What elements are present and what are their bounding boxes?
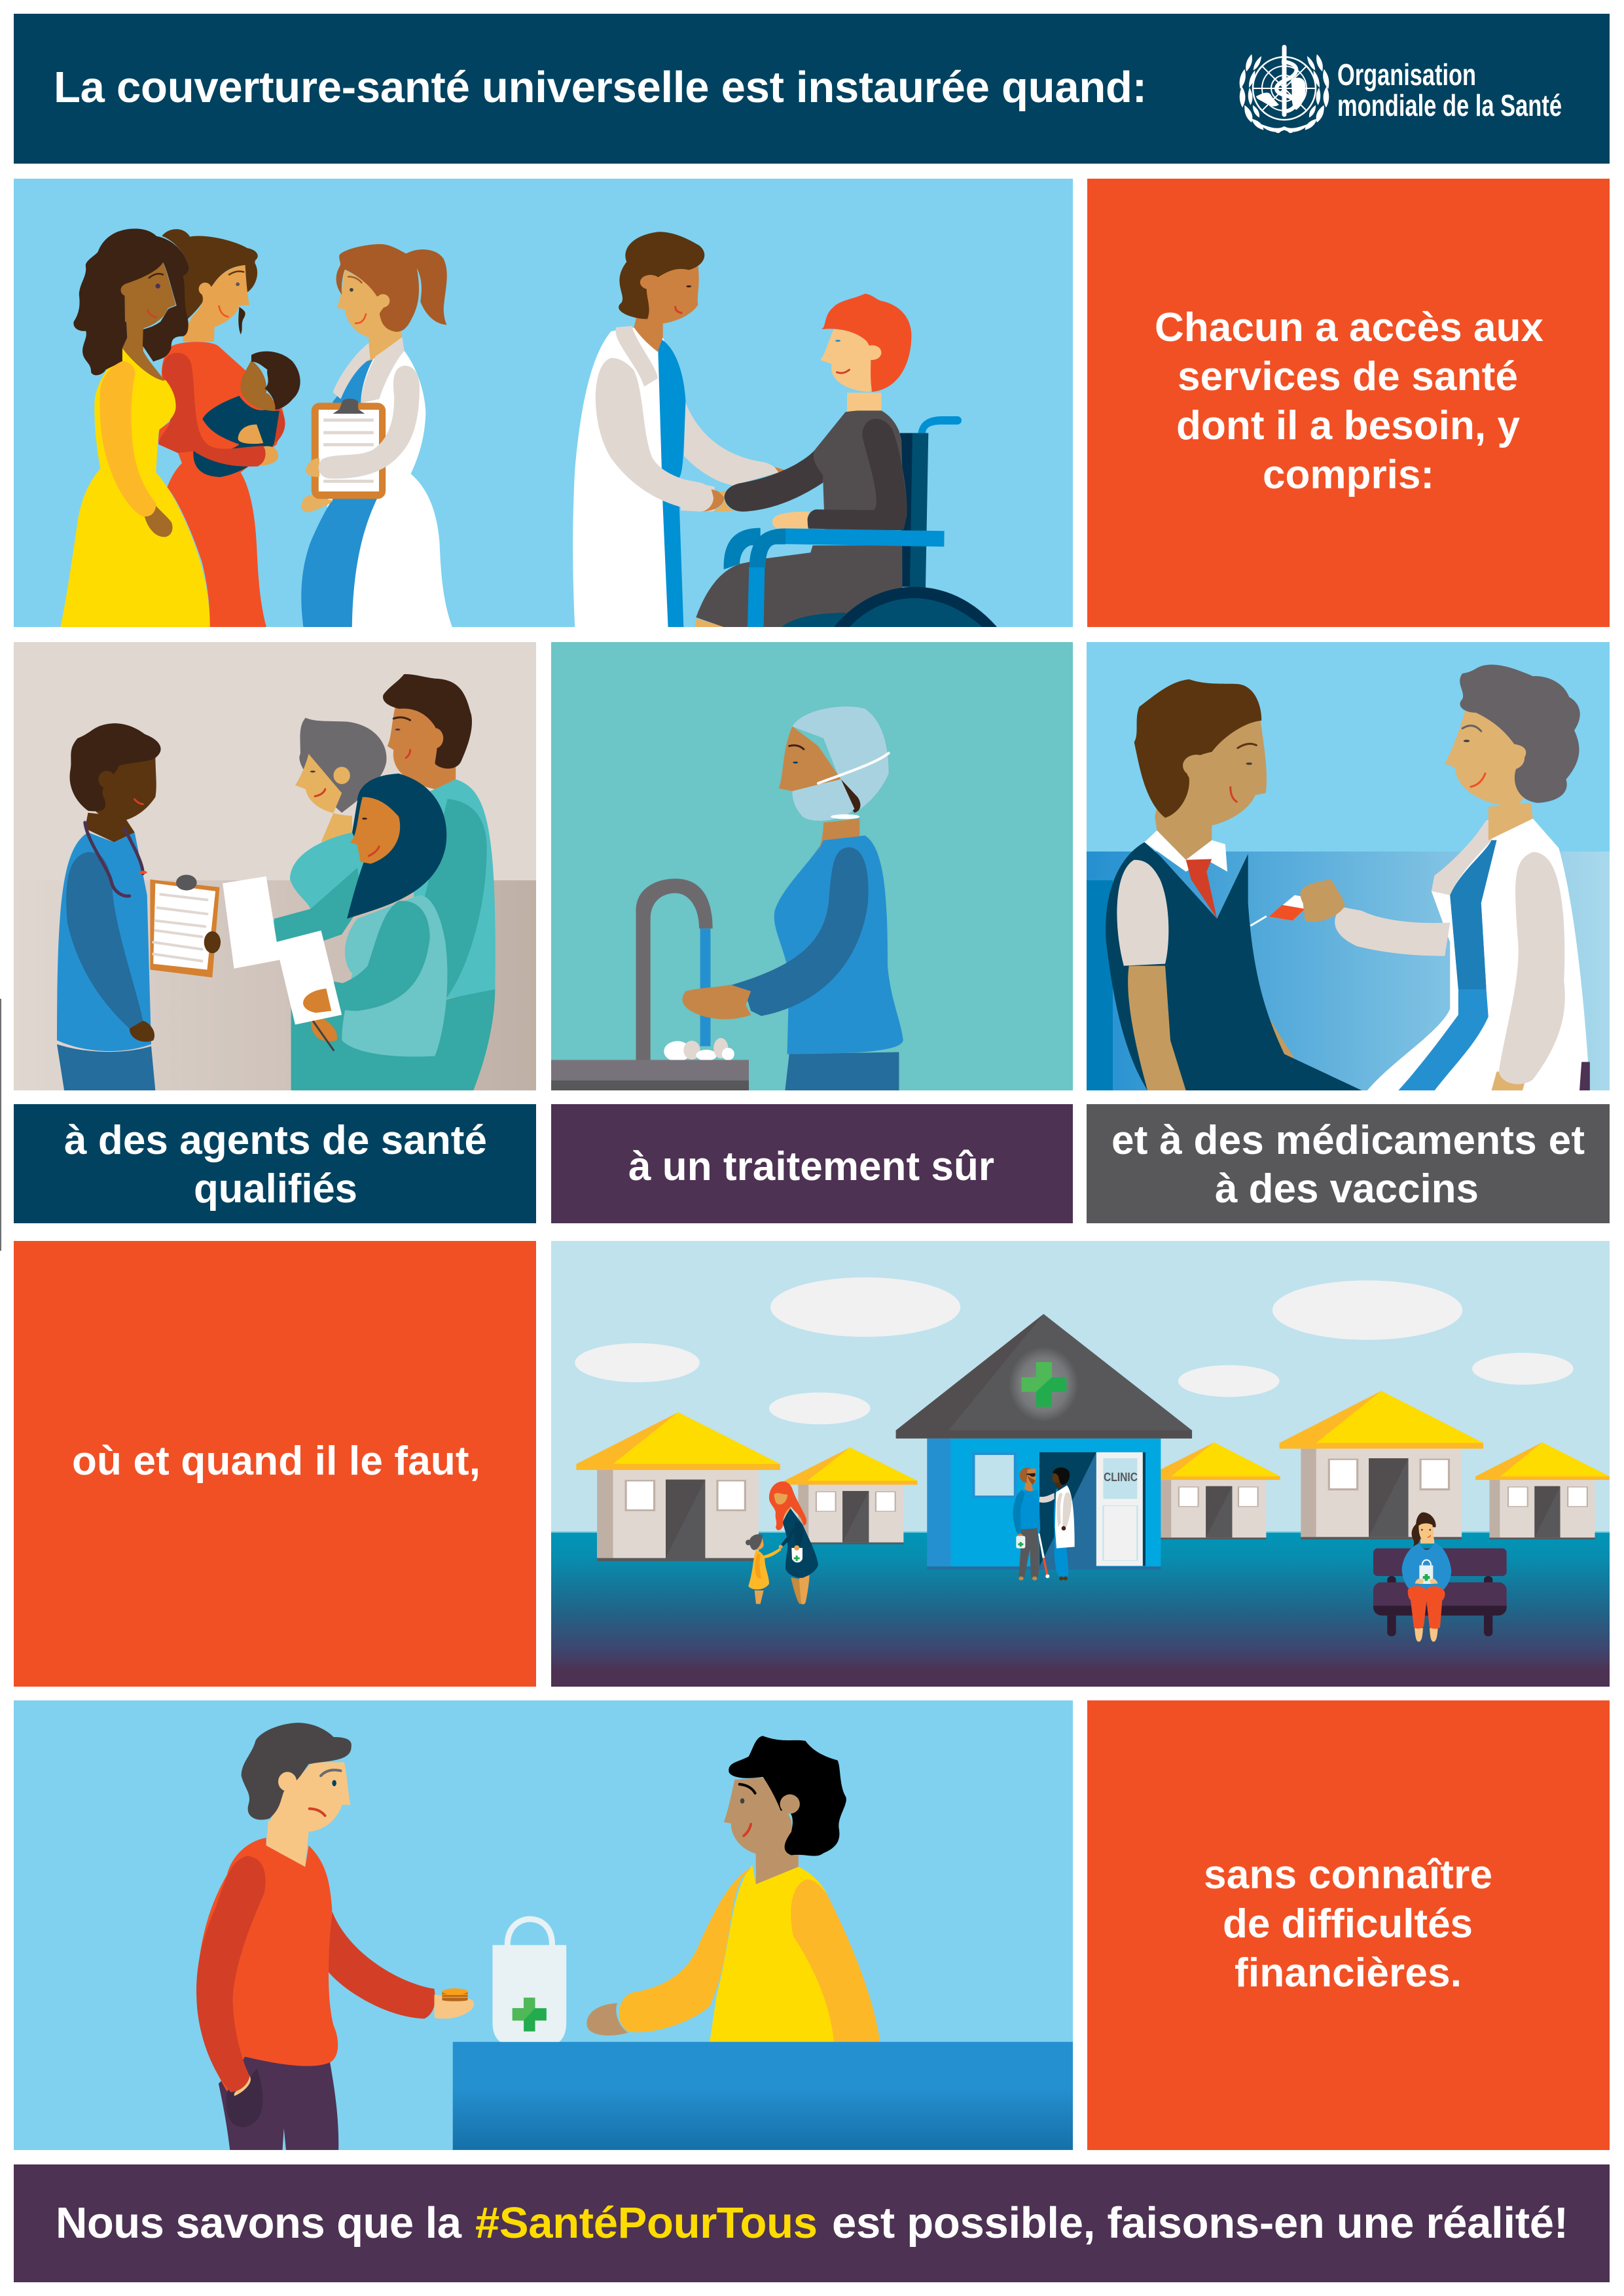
panel: paying for medicine illustration [14, 1700, 1073, 2150]
label: qualified health workers [14, 1104, 536, 1223]
clipboard [312, 399, 386, 499]
house: right of clinic [1147, 1443, 1280, 1539]
title: La couverture-santé universelle est instaurée quand: [54, 63, 1147, 112]
label: qualified health workers: à des agents de santé [64, 1118, 487, 1163]
figure: doctor with syringe [1251, 665, 1590, 1090]
panel: no financial hardship statement: financières. [1235, 1950, 1462, 1996]
panel: access statement: dont il a besoin, y [1176, 403, 1521, 448]
clouds [575, 1278, 1574, 1424]
panel: where and when statement [14, 1241, 536, 1687]
wheel [833, 587, 998, 628]
icon: medicine bag [492, 1919, 566, 2042]
figure: health worker with stethoscope [57, 723, 221, 1090]
footer banner [14, 2164, 1610, 2282]
label: medicines and vaccines [1087, 1104, 1610, 1223]
icon: tap and sink [551, 878, 749, 1090]
figure: visitor with white cane [1013, 1467, 1049, 1581]
clinic door sign: CLINIC [1104, 1471, 1138, 1484]
icon: medicine bag [1419, 1560, 1433, 1584]
panel: no financial hardship statement: sans connaître [1204, 1852, 1492, 1897]
baby [193, 351, 300, 477]
label: medicines and vaccines: à des vaccins [1215, 1166, 1479, 1211]
icon: coins [442, 1988, 467, 2001]
label: medicines and vaccines: et à des médicaments et [1111, 1118, 1585, 1163]
house: right large [1280, 1391, 1483, 1539]
house: left large [576, 1412, 780, 1561]
figure: clinic doctor [1039, 1467, 1075, 1581]
panel: access statement: compris: [1263, 452, 1434, 497]
bench [1373, 1549, 1507, 1636]
panel: no financial hardship statement: de difficultés [1223, 1901, 1473, 1946]
panel: people with health workers [14, 179, 1073, 628]
footer banner: Nous savons que la [56, 2198, 462, 2248]
older woman [299, 718, 386, 813]
figure: patient head [820, 294, 911, 392]
doctor's far arm [684, 401, 779, 486]
label: qualified health workers: qualifiés [194, 1166, 357, 1211]
panel: safe care illustration [551, 642, 1073, 1090]
figures: two women with baby and nurse [60, 228, 452, 628]
figure: doctor [573, 232, 715, 627]
building: clinic [896, 1314, 1192, 1570]
icon: WHO emblem [1240, 47, 1329, 133]
figure: person on bench [1373, 1513, 1507, 1641]
figures: doctor and patient heads [573, 232, 911, 627]
panel: no financial hardship statement [1087, 1700, 1610, 2150]
panel: village and clinic illustration [551, 1241, 1610, 1687]
figures: woman and child [746, 1481, 818, 1604]
house: far right [1475, 1443, 1610, 1539]
page edge mark [0, 999, 1, 1251]
figure: boy receiving vaccine [1106, 679, 1362, 1090]
logo wordmark [1337, 58, 1562, 122]
panel: access statement: services de santé [1178, 354, 1518, 399]
figure: surgeon washing hands [683, 707, 903, 1090]
house: left small [784, 1448, 918, 1544]
icon: syringe [1251, 884, 1328, 925]
counter [453, 2042, 1073, 2150]
clipboard [150, 880, 219, 978]
panel: where and when statement: où et quand il le faut, [72, 1439, 480, 1484]
logo wordmark: Organisation [1337, 58, 1476, 92]
figure: pharmacist [586, 1736, 880, 2042]
figures: family group [223, 674, 496, 1090]
figure: woman with baby [158, 229, 300, 628]
hashtag: #SantéPourTous [475, 2198, 818, 2248]
WHO logo [1240, 47, 1562, 133]
handshake [681, 450, 823, 512]
hijab woman [347, 774, 446, 919]
panel: access statement [1087, 179, 1610, 627]
header banner [14, 14, 1610, 164]
figure: patient in wheelchair [681, 393, 998, 628]
figure: woman in yellow dress [60, 228, 210, 628]
figure: worried customer [196, 1723, 474, 2150]
wheelchair back [724, 416, 962, 589]
figures: visitor and clinic doctor [1013, 1467, 1075, 1581]
figure: nurse with clipboard [301, 244, 452, 628]
footer banner: est possible, faisons-en une réalité! [832, 2198, 1568, 2248]
panel: health workers illustration [14, 642, 536, 1090]
label: safe care: à un traitement sûr [628, 1144, 994, 1189]
panel: vaccination illustration [1087, 642, 1610, 1090]
label: safe care [551, 1104, 1073, 1223]
panel: access statement: Chacun a accès aux [1155, 305, 1544, 350]
